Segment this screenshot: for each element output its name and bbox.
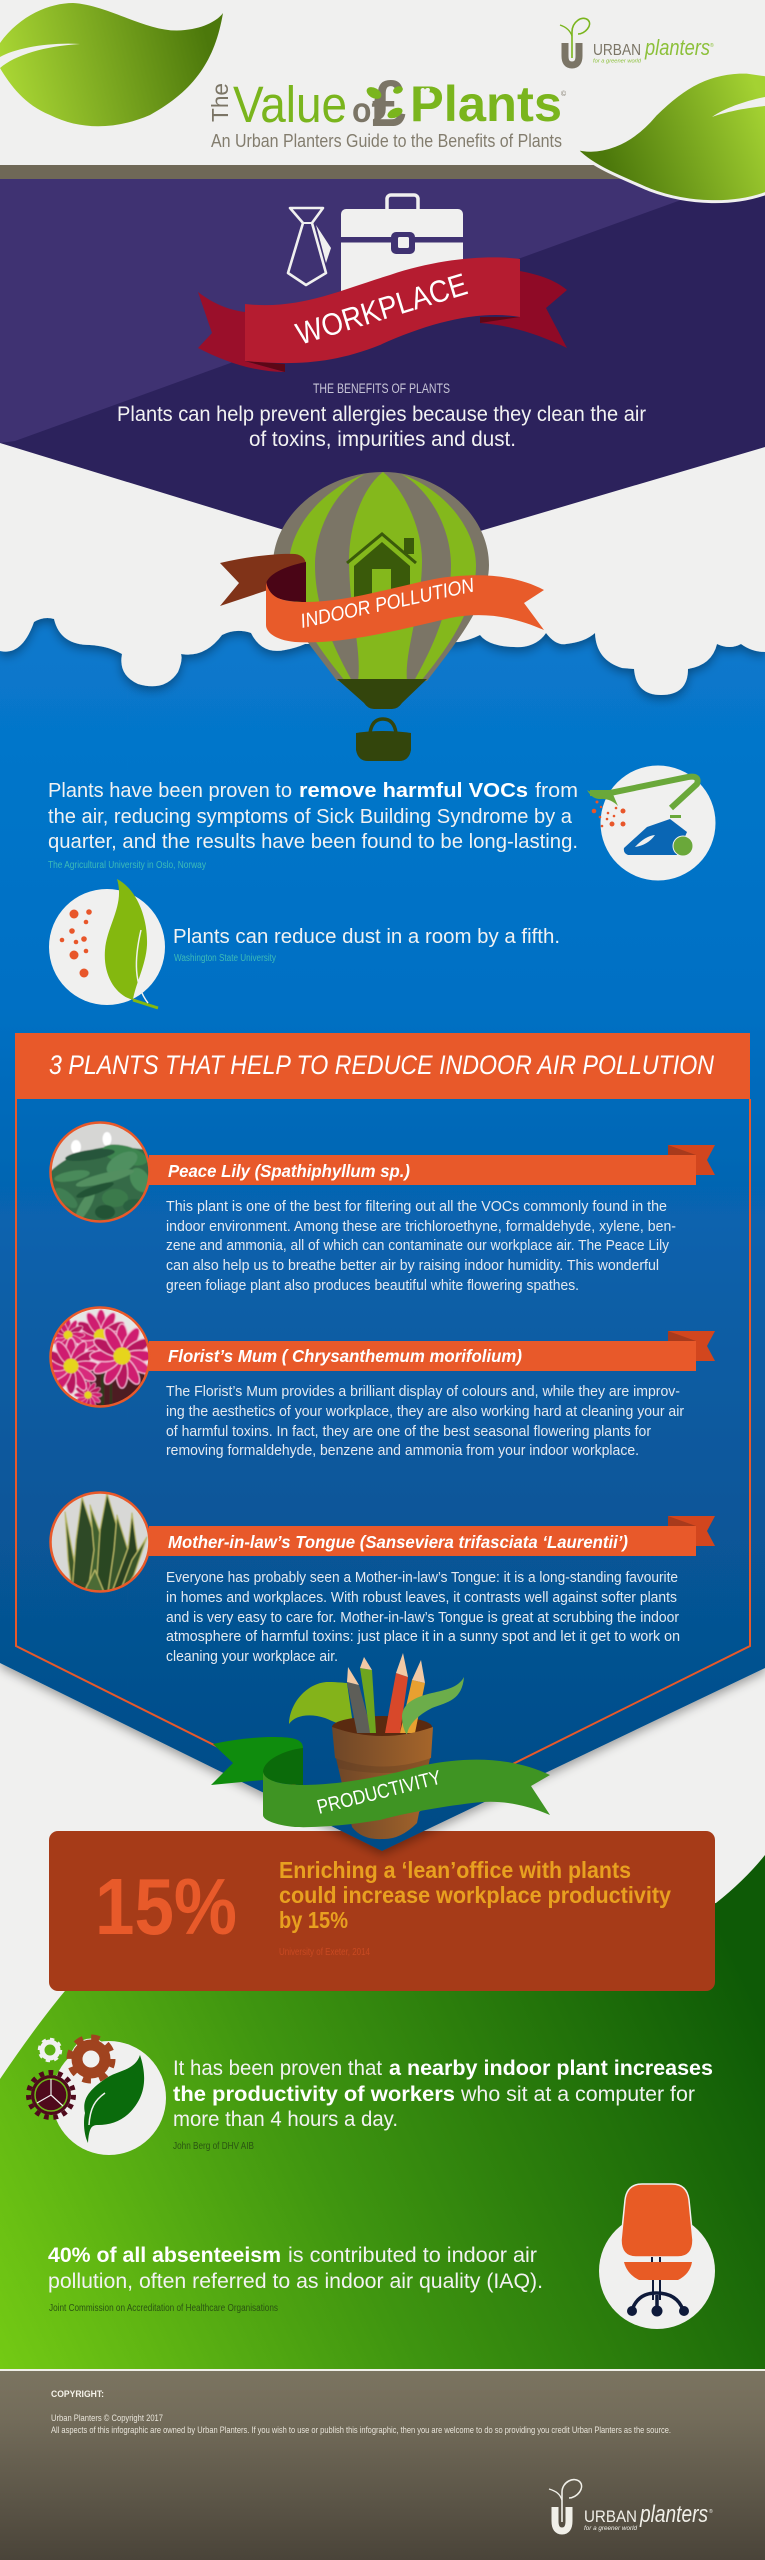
text: Mother-in-law's Tongue description [166, 1570, 680, 1665]
logo: Urban Planters footer: ® [709, 2508, 713, 2515]
copyright heading: COPYRIGHT: [51, 2389, 104, 2400]
text block: productivity of workers: a nearby indoor plant increases [389, 2057, 713, 2080]
statistic text: by 15% [279, 1907, 348, 1933]
text block: VOCs: remove harmful VOCs [299, 779, 528, 802]
title: The Value of Plants: Plants [410, 76, 562, 132]
text: allergies statement: Plants can help prevent allergies because they clean the air [117, 403, 646, 426]
banner: Workplace: WORKPLACE [292, 266, 471, 352]
right leaf [402, 1677, 464, 1735]
balloon basket [356, 719, 411, 761]
icon: tie [288, 208, 331, 285]
text block: productivity of workers: the productivity of workers [173, 2083, 455, 2106]
text block: VOCs: Plants have been proven to [48, 779, 292, 802]
title: The Value of Plants: £ [372, 66, 406, 140]
taupe header band [0, 165, 765, 179]
title: The Value of Plants [207, 66, 567, 140]
text block: productivity of workers: who sit at a computer for [460, 2083, 695, 2106]
icon: hot air balloon [273, 472, 489, 761]
heading: 3 plants [15, 1033, 750, 1099]
white clouds edge [0, 440, 765, 695]
logo: Urban Planters top: URBAN [593, 42, 641, 59]
text: Florist's Mum description: ing the aesthetics of your workplace, they are also working hard at cleaning your air [166, 1404, 684, 1420]
text: Peace Lily description: can also help us to breathe better air by raising indoor humidity. This wonderful [166, 1258, 659, 1274]
photo: Mother-in-law's Tongue [50, 1490, 150, 1595]
panel: plants frame [16, 1099, 750, 1829]
photo: Florist's Mum [49, 1306, 149, 1408]
text: Peace Lily description: indoor environment. Among these are trichloroethyne, formaldehyde, xylene, ben- [166, 1219, 676, 1235]
copyright text: Urban Planters © Copyright 2017 [51, 2413, 163, 2424]
text: dust: Plants can reduce dust in a room by a fifth. [173, 925, 560, 948]
banner: Workplace [198, 257, 567, 372]
text block: VOCs: quarter, and the results have been found to be long-lasting. [48, 830, 578, 853]
banner: Mother-in-law's Tongue: Mother-in-law’s Tongue (Sanseviera trifasciata ‘Laurentii’) [168, 1532, 628, 1552]
source: Joint Commission: Joint Commission on Accreditation of Healthcare Organisations [49, 2303, 278, 2314]
text: Florist's Mum description: removing formaldehyde, benzene and ammonia from your indoor workplace. [166, 1443, 639, 1459]
logo: Urban Planters top: for a greener world [593, 58, 642, 64]
banner: Indoor Pollution: INDOOR POLLUTION [298, 574, 477, 633]
source: University of Exeter: University of Exeter, 2014 [279, 1947, 370, 1958]
banner: Productivity: PRODUCTIVITY [315, 1767, 443, 1819]
text block: absenteeism: pollution, often referred to as indoor air quality (IAQ). [48, 2270, 543, 2293]
photo: Peace Lily [50, 1120, 154, 1225]
icon: office chair [599, 2184, 715, 2329]
icon: briefcase [341, 195, 463, 304]
title: The Value of Plants: of [352, 91, 382, 130]
logo mark [560, 18, 590, 65]
pot body [336, 1758, 430, 1839]
statistic text: could increase workplace productivity [279, 1882, 671, 1908]
dust particles [592, 800, 626, 827]
banner: Peace Lily [149, 1145, 715, 1185]
text: Mother-in-law's Tongue description: and is very easy to care for. Mother-in-law’s Tongue is great at scrubbing the indoor [166, 1610, 679, 1626]
title: The Value of Plants: The [207, 83, 233, 122]
logo: Urban Planters footer: for a greener world [584, 2526, 638, 2532]
text: Peace Lily description: zene and ammonia, all of which can contaminate our workplace air. The Peace Lily [166, 1238, 670, 1254]
logo: Urban Planters footer: URBAN [584, 2507, 637, 2526]
purple workplace panel [0, 179, 765, 560]
banner: Mother-in-law's Tongue [149, 1516, 715, 1556]
big number 15%: 15% [95, 1862, 237, 1951]
balloon skirt [337, 679, 427, 709]
icon: top right leaf [575, 72, 765, 202]
text: Peace Lily description: This plant is one of the best for filtering out all the VOCs commonly found in the [166, 1199, 667, 1215]
blue section background [0, 600, 765, 1851]
subtitle: An Urban Planters Guide to the Benefits of Plants [211, 131, 562, 151]
text: Peace Lily description: green foliage plant also produces beautiful white flowering spathes. [166, 1278, 579, 1294]
green lower section background [0, 1855, 765, 2371]
text block: VOCs [48, 779, 578, 853]
pot rim [332, 1727, 433, 1766]
banner: Florist's Mum: Florist’s Mum ( Chrysanthemum morifolium) [168, 1346, 522, 1366]
orange gear [70, 2038, 112, 2080]
banner: Productivity [211, 1737, 550, 1827]
logo: Urban Planters top: planters [644, 35, 710, 60]
text: Mother-in-law's Tongue description: cleaning your workplace air. [166, 1649, 338, 1665]
text: Mother-in-law's Tongue description: atmosphere of harmful toxins: just place it in a sunny spot and let it get to work on [166, 1629, 680, 1645]
banner: Florist's Mum [149, 1331, 715, 1371]
text: allergies statement [117, 403, 646, 451]
left leaf [289, 1682, 353, 1726]
text block: productivity of workers [173, 2057, 713, 2131]
text block: absenteeism [48, 2244, 543, 2293]
text block: VOCs: from [535, 779, 578, 802]
title: The Value of Plants: © [561, 90, 567, 98]
logo: Urban Planters top: ® [710, 42, 714, 49]
text: Florist's Mum description: The Florist’s Mum provides a brilliant display of colours and, while they are improv- [166, 1384, 680, 1400]
banner: Indoor Pollution [220, 554, 544, 642]
statistic text [279, 1857, 671, 1933]
icon: plant pot with pencils [289, 1653, 464, 1839]
text block: productivity of workers: more than 4 hours a day. [173, 2108, 398, 2131]
text block: VOCs: the air, reducing symptoms of Sick Building Syndrome by a [48, 805, 573, 828]
logo: Urban Planters top [560, 18, 714, 65]
text: Peace Lily description [166, 1199, 676, 1294]
text block: productivity of workers: It has been proven that [173, 2057, 382, 2080]
icon: vacuum cleaner [587, 766, 716, 880]
icon: gears and leaf [28, 2038, 166, 2155]
text: Mother-in-law's Tongue description: Everyone has probably seen a Mother-in-law’s Tongue: it is a long-standing favourite [166, 1570, 678, 1586]
icon: top left leaf [0, 3, 223, 126]
heading: the benefits of plants: THE BENEFITS OF PLANTS [313, 381, 450, 396]
copyright text [51, 2413, 671, 2436]
panel: 15% productivity statistic [49, 1831, 715, 1991]
title: The Value of Plants: Value [233, 76, 347, 133]
pencils [347, 1653, 425, 1733]
white gear [40, 2040, 60, 2060]
panel: footer [0, 2369, 765, 2560]
maroon gear [28, 2072, 74, 2118]
small leaves on pound sign [365, 85, 404, 120]
text: Mother-in-law's Tongue description: in homes and workplaces. With robust leaves, it contrasts well against softer plants [166, 1590, 677, 1606]
text block: absenteeism: 40% of all absenteeism [48, 2244, 281, 2267]
text: Florist's Mum description: of harmful toxins. In fact, they are one of the best seasonal flowering plants for [166, 1424, 651, 1440]
icon: leaf and dust [49, 879, 165, 1008]
statistic text: Enriching a ‘lean’office with plants [279, 1857, 631, 1883]
source: Oslo: The Agricultural University in Oslo, Norway [48, 860, 206, 871]
source: Washington State: Washington State University [174, 953, 276, 964]
banner: Peace Lily: Peace Lily (Spathiphyllum sp.) [168, 1161, 410, 1181]
logo: Urban Planters footer: planters [639, 2501, 708, 2528]
house icon [347, 534, 416, 610]
text: Florist's Mum description [166, 1384, 684, 1459]
text: allergies statement: of toxins, impurities and dust. [249, 428, 516, 451]
logo: Urban Planters footer [549, 2480, 713, 2532]
text block: absenteeism: is contributed to indoor air [288, 2244, 537, 2267]
source: John Berg: John Berg of DHV AIB [173, 2141, 254, 2152]
